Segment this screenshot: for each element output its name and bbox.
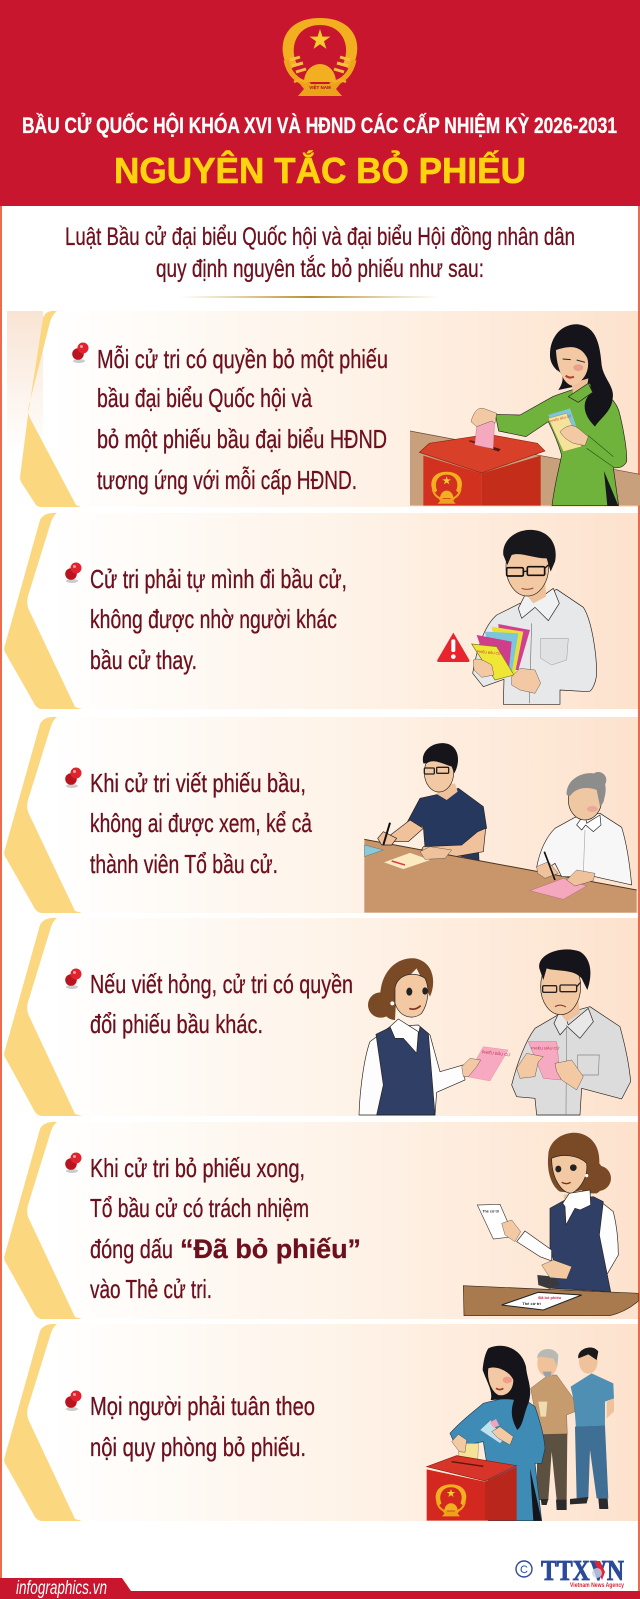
logo: TTXVN <box>516 1556 625 1589</box>
illustration: woman casting ballot <box>410 324 640 506</box>
text block: bầu cử thay. <box>90 645 197 675</box>
bullet pin <box>65 562 82 583</box>
bullet pin <box>65 1390 82 1411</box>
panel 1: one ballot each <box>2 311 640 507</box>
bullet pin <box>65 768 82 788</box>
text block: Khi cử tri viết phiếu bầu, <box>90 768 306 798</box>
text block: Nếu viết hỏng, cử tri có quyền <box>90 969 353 999</box>
icon: warning triangle <box>437 633 469 662</box>
illustration: officer and voter exchanging ballot <box>359 949 631 1115</box>
icon: national emblem <box>283 18 357 96</box>
illustration: officer stamping card <box>463 1133 638 1316</box>
text block <box>90 768 312 879</box>
text block: Mỗi cử tri có quyền bỏ một phiếu <box>97 344 388 374</box>
bullet pin <box>65 1152 82 1173</box>
text block: Khi cử tri bỏ phiếu xong, <box>90 1153 305 1183</box>
icon: emblem on ballot box <box>436 1484 466 1516</box>
illustration: two voters writing <box>364 743 637 913</box>
text block <box>90 969 353 1039</box>
illustration: woman casting ballot: PHIẾU BẦU CỬ <box>550 413 572 423</box>
text block <box>90 1153 361 1304</box>
panel 6: follow polling rules <box>2 1324 638 1521</box>
text block: nội quy phòng bỏ phiếu. <box>90 1432 306 1462</box>
intro text <box>65 223 575 283</box>
panel 4: spoiled ballot exchange <box>2 918 638 1116</box>
text block: Cử tri phải tự mình đi bầu cử, <box>90 564 347 594</box>
icon: national emblem: VIỆT NAM <box>309 83 331 90</box>
text block <box>90 564 347 675</box>
illustration: man holding ballots: PHIẾU BẦU CỬ <box>477 649 501 656</box>
icon: emblem on ballot box <box>431 472 462 504</box>
logo: TTXVN: C <box>520 1564 528 1576</box>
text block: vào Thẻ cử tri. <box>90 1274 212 1304</box>
bullet pin <box>65 968 82 989</box>
text block: không được nhờ người khác <box>90 604 337 634</box>
text block: bỏ một phiếu bầu đại biểu HĐND <box>97 424 387 454</box>
panel 3: secret writing <box>2 717 638 913</box>
text block: tương ứng với mỗi cấp HĐND. <box>97 465 357 495</box>
panel 2: vote in person <box>2 513 638 709</box>
text block: bầu đại biểu Quốc hội và <box>97 383 312 413</box>
logo: TTXVN: TTXVN <box>541 1556 624 1587</box>
text block: Tổ bầu cử có trách nhiệm <box>90 1193 309 1223</box>
source label: infographics.vn <box>16 1578 107 1599</box>
text block: thành viên Tổ bầu cử. <box>90 849 278 879</box>
illustration: officer stamping card: Thẻ cử tri <box>522 1301 541 1306</box>
intro text: quy định nguyên tắc bỏ phiếu như sau: <box>156 254 484 283</box>
text block: Mọi người phải tuân theo <box>90 1391 315 1421</box>
bullet pin <box>72 342 88 363</box>
text block: “Đã bỏ phiếu” <box>180 1234 361 1264</box>
illustration: officer and voter exchanging ballot: PHIẾU BẦU CỬ <box>482 1049 511 1057</box>
illustration: officer stamping card: Đã bỏ phiếu <box>538 1295 562 1300</box>
logo: TTXVN: Vietnam News Agency <box>570 1583 625 1589</box>
header band <box>0 0 640 206</box>
illustration: officer and voter exchanging ballot: PHIẾU BẦU CỬ <box>531 1045 560 1050</box>
footer band <box>0 1578 640 1599</box>
panel 5: stamp voter card <box>2 1122 638 1319</box>
text block: không ai được xem, kể cả <box>90 808 312 838</box>
text block: đổi phiếu bầu khác. <box>90 1009 263 1039</box>
illustration: voters queueing at ballot box <box>427 1346 614 1521</box>
text block: đóng dấu <box>90 1234 173 1264</box>
illustration: officer stamping card: Thẻ cử tri <box>482 1209 499 1213</box>
main heading: NGUYÊN TẮC BỎ PHIẾU <box>114 149 526 191</box>
text block <box>97 344 388 495</box>
text block <box>90 1391 315 1462</box>
illustration: man holding ballots <box>437 530 597 704</box>
